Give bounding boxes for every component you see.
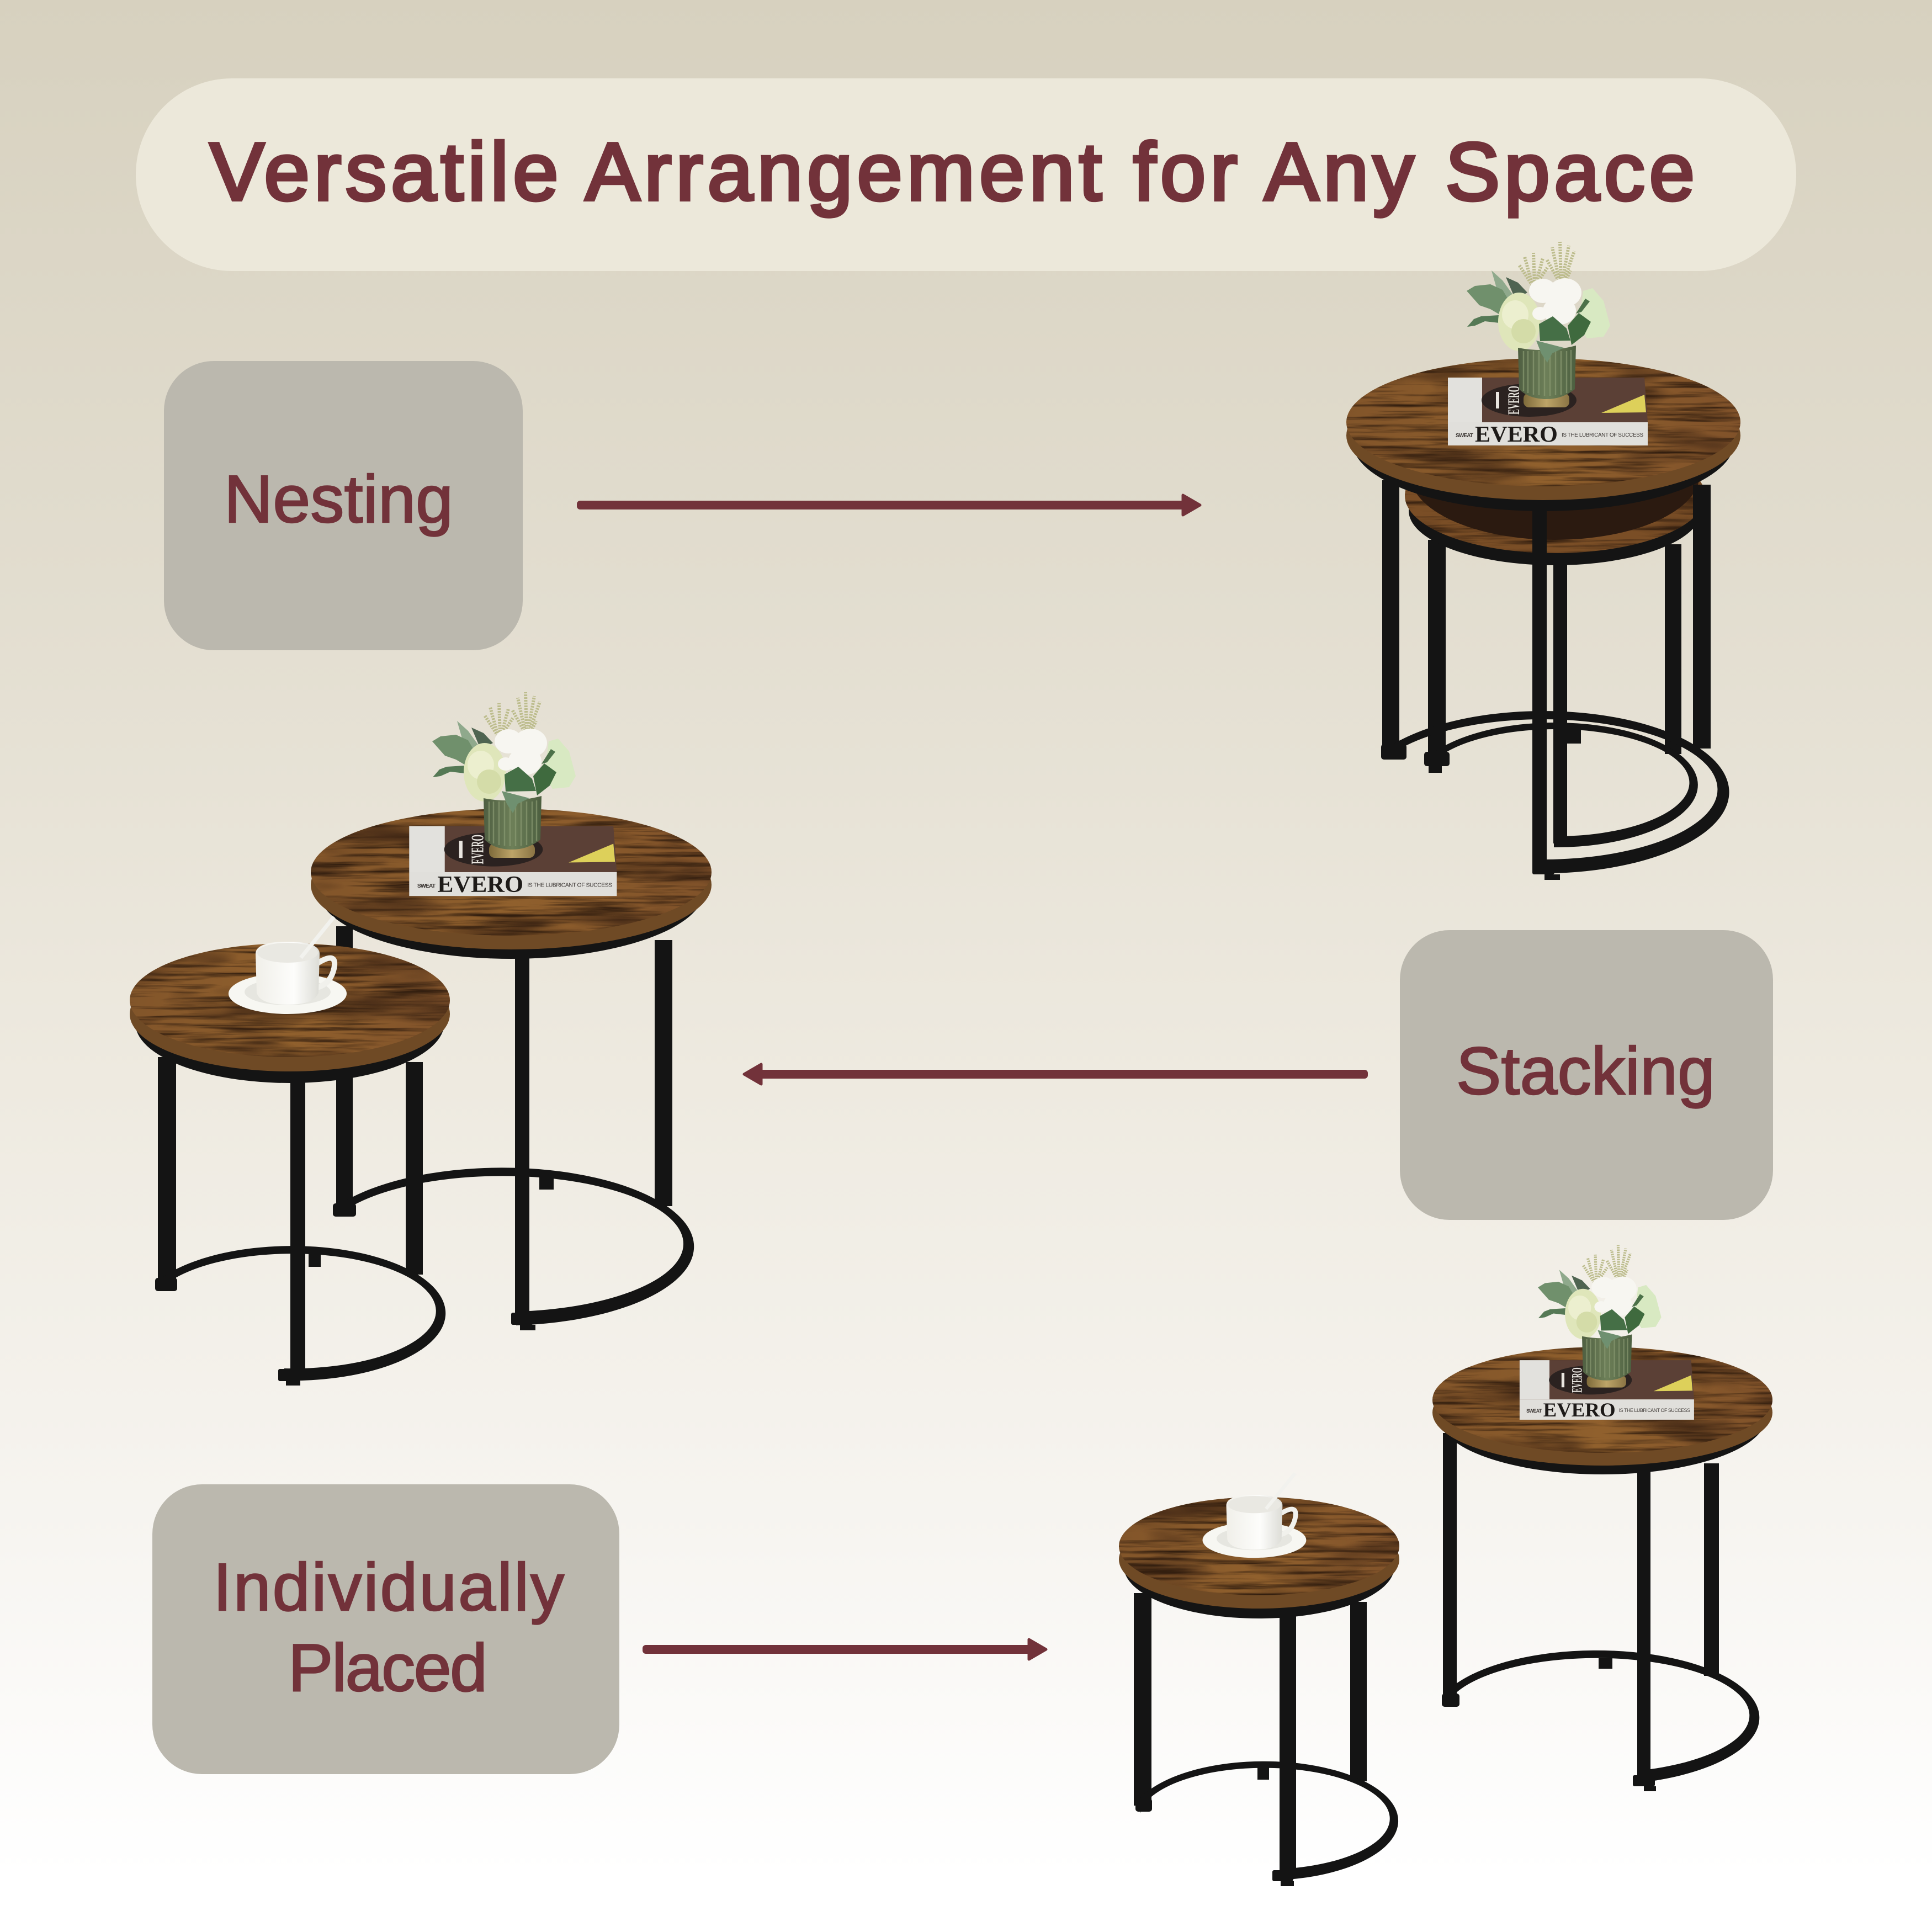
- title banner: [136, 78, 1796, 271]
- Individually Placed text: Individually: [213, 1549, 564, 1625]
- Nesting text: Nesting: [224, 461, 453, 537]
- book: [1448, 378, 1648, 447]
- book: SWEAT: [417, 883, 436, 889]
- panel: Nesting label: [164, 361, 523, 650]
- book: EVERO: [468, 835, 487, 864]
- arrow: Stacking to side-by-side tables: [744, 1064, 1368, 1084]
- Individually Placed text: [213, 1549, 564, 1705]
- panel: Individually Placed label: [152, 1484, 619, 1774]
- product photo: stacked tables side by side: [130, 692, 712, 1386]
- flower vase: [432, 692, 576, 858]
- book: EVERO: [1505, 386, 1523, 415]
- book: IS THE LUBRICANT OF SUCCESS: [1562, 432, 1643, 438]
- flower vase: [1467, 242, 1610, 407]
- book: EVERO: [1475, 421, 1558, 447]
- book: SWEAT: [1526, 1408, 1542, 1414]
- product photo: nested tables with book and flowers: [1346, 242, 1740, 880]
- large table: [311, 692, 712, 1330]
- Individually Placed text: Placed: [288, 1630, 487, 1705]
- Stacking text: Stacking: [1456, 1033, 1715, 1108]
- arrow: Individually Placed to separate tables: [643, 1639, 1046, 1659]
- outer nesting table: [1346, 358, 1740, 880]
- coffee cup: [229, 917, 347, 1014]
- title text: Versatile Arrangement for Any Space: [210, 126, 1695, 217]
- book: [1520, 1360, 1694, 1421]
- book: EVERO: [437, 872, 523, 898]
- book: EVERO: [1543, 1399, 1616, 1421]
- book: SWEAT: [1456, 433, 1473, 439]
- small table with cup: [130, 917, 450, 1386]
- small table with cup: [1119, 1473, 1399, 1886]
- book: IS THE LUBRICANT OF SUCCESS: [1619, 1408, 1690, 1413]
- book: [409, 826, 617, 898]
- book: EVERO: [1569, 1367, 1585, 1393]
- product photo: individually placed tables: [1119, 1245, 1772, 1886]
- coffee cup: [1202, 1473, 1306, 1558]
- inner nested table: [1405, 410, 1705, 847]
- book: IS THE LUBRICANT OF SUCCESS: [527, 883, 612, 889]
- panel: Stacking label: [1400, 930, 1773, 1220]
- arrow: Nesting to nested tables: [577, 495, 1200, 515]
- large table: [1432, 1245, 1772, 1791]
- flower vase: [1538, 1245, 1662, 1388]
